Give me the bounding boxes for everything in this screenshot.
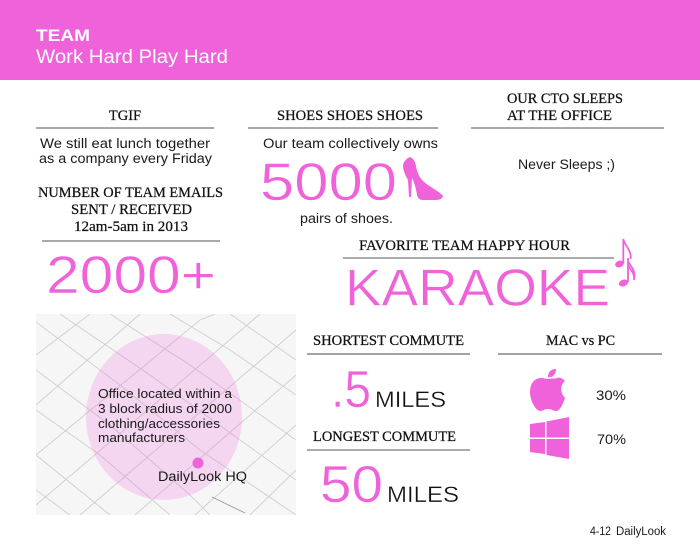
panel: Mac vs PC: 70% (597, 431, 626, 447)
panel: karaoke: FAVORITE TEAM HAPPY HOUR (359, 238, 570, 254)
panel: shortest commute: MILES (375, 387, 446, 412)
map panel (36, 314, 296, 515)
icon: apple (530, 369, 565, 411)
panel: TGIF (36, 108, 214, 166)
map caption: manufacturers (98, 430, 186, 445)
title: TEAM (36, 26, 90, 45)
panel: CTO sleeps: OUR CTO SLEEPS (507, 91, 623, 107)
panel: shoes: Our team collectively owns (263, 136, 438, 151)
footer credit: DailyLook (616, 526, 666, 538)
panel: team emails (38, 185, 223, 305)
icon: windows (530, 417, 569, 459)
footer credit: 4-12 (590, 526, 611, 538)
panel: CTO sleeps (471, 91, 664, 172)
panel: CTO sleeps: AT THE OFFICE (507, 108, 612, 124)
radius circle (86, 334, 242, 500)
panel: longest commute: MILES (387, 482, 459, 507)
panel: longest commute: LONGEST COMMUTE (313, 429, 456, 445)
panel: shoes: pairs of shoes. (300, 211, 393, 226)
location dot (192, 458, 204, 468)
panel: TGIF: We still eat lunch together (40, 136, 211, 151)
emails number: 2000+ (46, 246, 216, 305)
panel: TGIF: as a company every Friday (39, 151, 212, 166)
icon: music notes (614, 239, 634, 288)
panel: team emails: 12am-5am in 2013 (74, 219, 188, 235)
subtitle: Work Hard Play Hard (36, 47, 228, 68)
map caption: 3 block radius of 2000 (98, 401, 232, 416)
shoes number: 5000 (260, 153, 397, 212)
panel: Mac vs PC (498, 333, 662, 459)
panel: TGIF: TGIF (109, 108, 141, 124)
map caption: Office located within a (98, 386, 233, 401)
panel: team emails: SENT / RECEIVED (71, 202, 192, 218)
panel: shortest commute (307, 333, 470, 419)
panel: Mac vs PC: 30% (596, 387, 626, 403)
panel: team emails: NUMBER OF TEAM EMAILS (38, 185, 223, 201)
location label: DailyLook HQ (158, 469, 247, 484)
longest value: 50 (320, 456, 383, 514)
footer credit (590, 526, 666, 538)
karaoke word: KARAOKE (345, 260, 610, 318)
map caption: clothing/accessories (98, 416, 221, 431)
shortest value: .5 (331, 361, 371, 419)
panel: CTO sleeps: Never Sleeps ;) (518, 157, 615, 172)
header banner (0, 0, 700, 80)
panel: shoes (248, 108, 443, 226)
map caption (98, 386, 233, 445)
panel: shoes: SHOES SHOES SHOES (277, 108, 423, 124)
panel: karaoke (343, 238, 634, 318)
panel: Mac vs PC: MAC vs PC (546, 333, 615, 349)
panel: longest commute (307, 429, 470, 514)
icon: high heel shoe (403, 157, 443, 200)
panel: shortest commute: SHORTEST COMMUTE (313, 333, 464, 349)
